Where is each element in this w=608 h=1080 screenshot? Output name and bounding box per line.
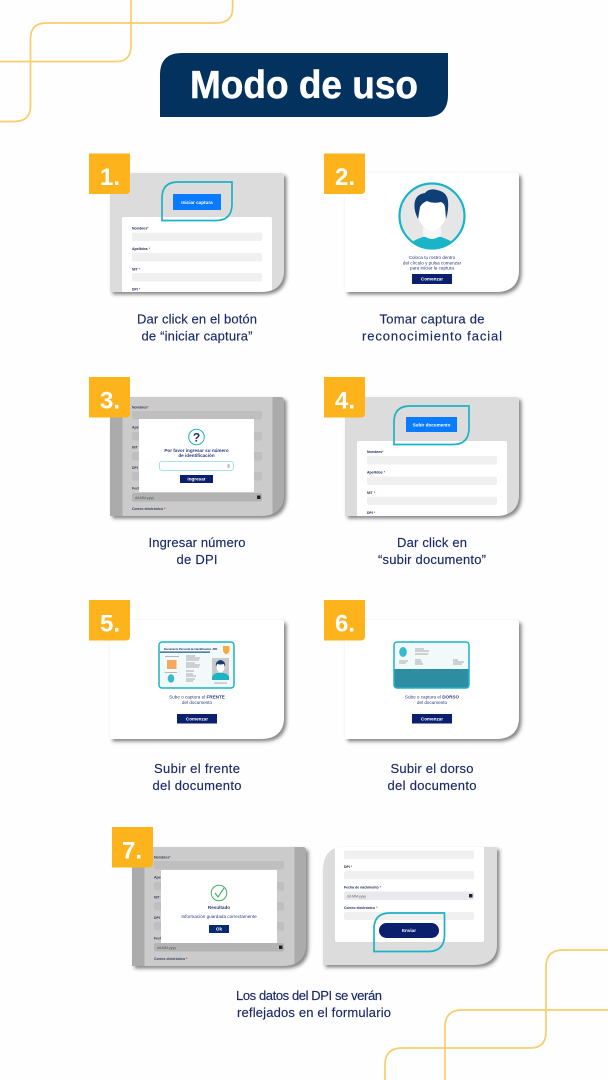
modal: result saved — [161, 870, 277, 943]
step 2 caption — [362, 312, 502, 344]
step 7 badge: 7. — [122, 838, 142, 864]
step 7 caption — [236, 988, 391, 1020]
step 7 badge — [112, 827, 153, 868]
step 1 screen: DPI * — [132, 288, 141, 292]
decorative lines: bottom right — [385, 950, 608, 1080]
step 2 screen: del círculo y pulsa comenzar — [403, 260, 462, 265]
step 4 caption — [378, 535, 486, 567]
step 5 caption: del documento — [152, 778, 242, 793]
step 5 caption: Subir el frente — [154, 761, 240, 776]
step 7 screen: result — [132, 847, 306, 966]
step 7 caption: Los datos del DPI se verán — [236, 988, 382, 1003]
step 7 screen: result: DPI * — [154, 916, 163, 920]
step 2 caption: reconocimiento facial — [362, 328, 502, 344]
step 7 screen: result: Apellidos * — [154, 876, 173, 880]
step 7 screen: result: Correo electrónico * — [154, 957, 188, 961]
step 6 caption — [388, 761, 476, 793]
step 2 screen: Coloca tu rostro dentro — [409, 255, 456, 260]
step 6 badge: 6. — [335, 610, 355, 638]
step 4 caption: Dar click en — [397, 535, 467, 550]
step 2 screen: Comenzar — [421, 277, 443, 282]
step 1 badge: 1. — [100, 164, 120, 191]
step 7 screen: form submit: Enviar — [402, 928, 416, 933]
step 5 badge — [89, 600, 130, 640]
step 6 badge — [324, 600, 365, 640]
step 4 badge — [324, 377, 365, 418]
modal: identification number — [139, 419, 254, 492]
step 6 screen — [345, 620, 519, 739]
step 5 screen: del documento — [182, 700, 213, 705]
modal: result saved: Resultado — [208, 905, 230, 910]
step 5 screen — [110, 620, 284, 739]
step 7 screen: form submit: Fecha de nacimiento * — [344, 886, 382, 890]
step 1 screen: Apellidos * — [132, 247, 151, 251]
step 7 screen: result: dd-MM-yyyy — [157, 946, 176, 950]
step 1 screen — [110, 173, 284, 297]
step 4 screen: NIT * — [367, 491, 376, 495]
step 6 screen: del documento — [417, 700, 448, 705]
step 3 caption: de DPI — [176, 552, 218, 567]
step 4 screen: Nombres* — [367, 450, 384, 454]
ID card front — [159, 642, 234, 688]
title banner: Modo de uso — [190, 64, 418, 107]
step 7 screen: result: NIT * — [154, 896, 163, 900]
step 3 screen: DPI * — [132, 466, 141, 470]
step 6 screen: Comenzar — [421, 716, 443, 722]
step 3 screen: Correo electrónico * — [132, 507, 166, 511]
step 7 screen: result: Nombres* — [154, 856, 171, 860]
step 4 screen: DPI * — [367, 511, 376, 515]
step 6 screen: Sube o captura el DORSO — [405, 694, 459, 700]
step 2 badge: 2. — [335, 164, 355, 191]
step 1 caption — [137, 312, 257, 344]
step 4 screen — [345, 397, 519, 521]
step 7 screen: result: Fecha de nacimiento * — [154, 936, 192, 940]
modal: identification number: Por favor ingresar su número — [164, 448, 229, 453]
step 5 badge: 5. — [100, 610, 120, 638]
step 3 badge — [89, 377, 130, 418]
step 2 screen: para iniciar la captura — [410, 266, 454, 271]
step 1 badge — [89, 154, 130, 194]
step 7 screen: form submit: Correo electrónico * — [344, 906, 378, 910]
modal: result saved: Ok — [216, 927, 223, 932]
decorative lines: top left — [0, 0, 233, 122]
step 3 screen: NIT * — [132, 446, 141, 450]
step 1 caption: de “iniciar captura” — [142, 328, 252, 344]
step 5 caption — [152, 761, 242, 793]
step 5 screen: Comenzar — [186, 716, 208, 722]
step 3 screen: Nombres* — [132, 406, 149, 410]
step 1 caption: Dar click en el botón — [137, 312, 257, 326]
step 2 badge — [324, 154, 365, 194]
ID card back — [394, 642, 469, 688]
step 1 screen: Nombres* — [132, 226, 149, 230]
step 4 screen: Apellidos * — [367, 470, 386, 474]
step 3 screen — [110, 397, 284, 516]
step 3 screen: dd-MM-yyyy — [135, 496, 154, 500]
ID card front: Documento Personal de Identificación -DPI- — [164, 647, 218, 651]
step 7 screen: form submit: DPI * — [344, 865, 353, 869]
step 3 caption: Ingresar número — [148, 535, 246, 550]
title banner — [160, 53, 448, 117]
modal: identification number: ? — [193, 430, 200, 444]
step 5 screen: Sube o captura el FRENTE — [169, 694, 225, 700]
step 3 screen: Fecha de nacimiento * — [132, 486, 170, 490]
step 7 screen: form submit — [323, 843, 497, 965]
step 1 screen: Iniciar captura — [181, 200, 213, 205]
step 4 screen: Subir documento — [413, 422, 451, 427]
step 2 caption: Tomar captura de — [380, 312, 484, 326]
step 3 badge: 3. — [100, 388, 120, 414]
step 3 screen: Apellidos * — [132, 426, 151, 430]
modal: result saved: Información guardada correctamente — [181, 914, 257, 919]
step 7 caption: reflejados en el formulario — [237, 1005, 391, 1020]
step 2 screen — [345, 173, 519, 292]
icon: face in circle — [400, 184, 464, 253]
step 1 screen: NIT * — [132, 268, 141, 272]
modal: identification number: de identificación — [178, 453, 215, 458]
step 3 caption — [148, 535, 246, 567]
step 4 badge: 4. — [335, 388, 355, 414]
step 7 screen: form submit: dd-MM-yyyy — [347, 894, 366, 898]
step 6 caption: del documento — [388, 778, 476, 793]
step 4 caption: “subir documento” — [378, 552, 486, 567]
step 6 caption: Subir el dorso — [390, 761, 474, 776]
modal: identification number: Ingresar — [187, 477, 206, 482]
